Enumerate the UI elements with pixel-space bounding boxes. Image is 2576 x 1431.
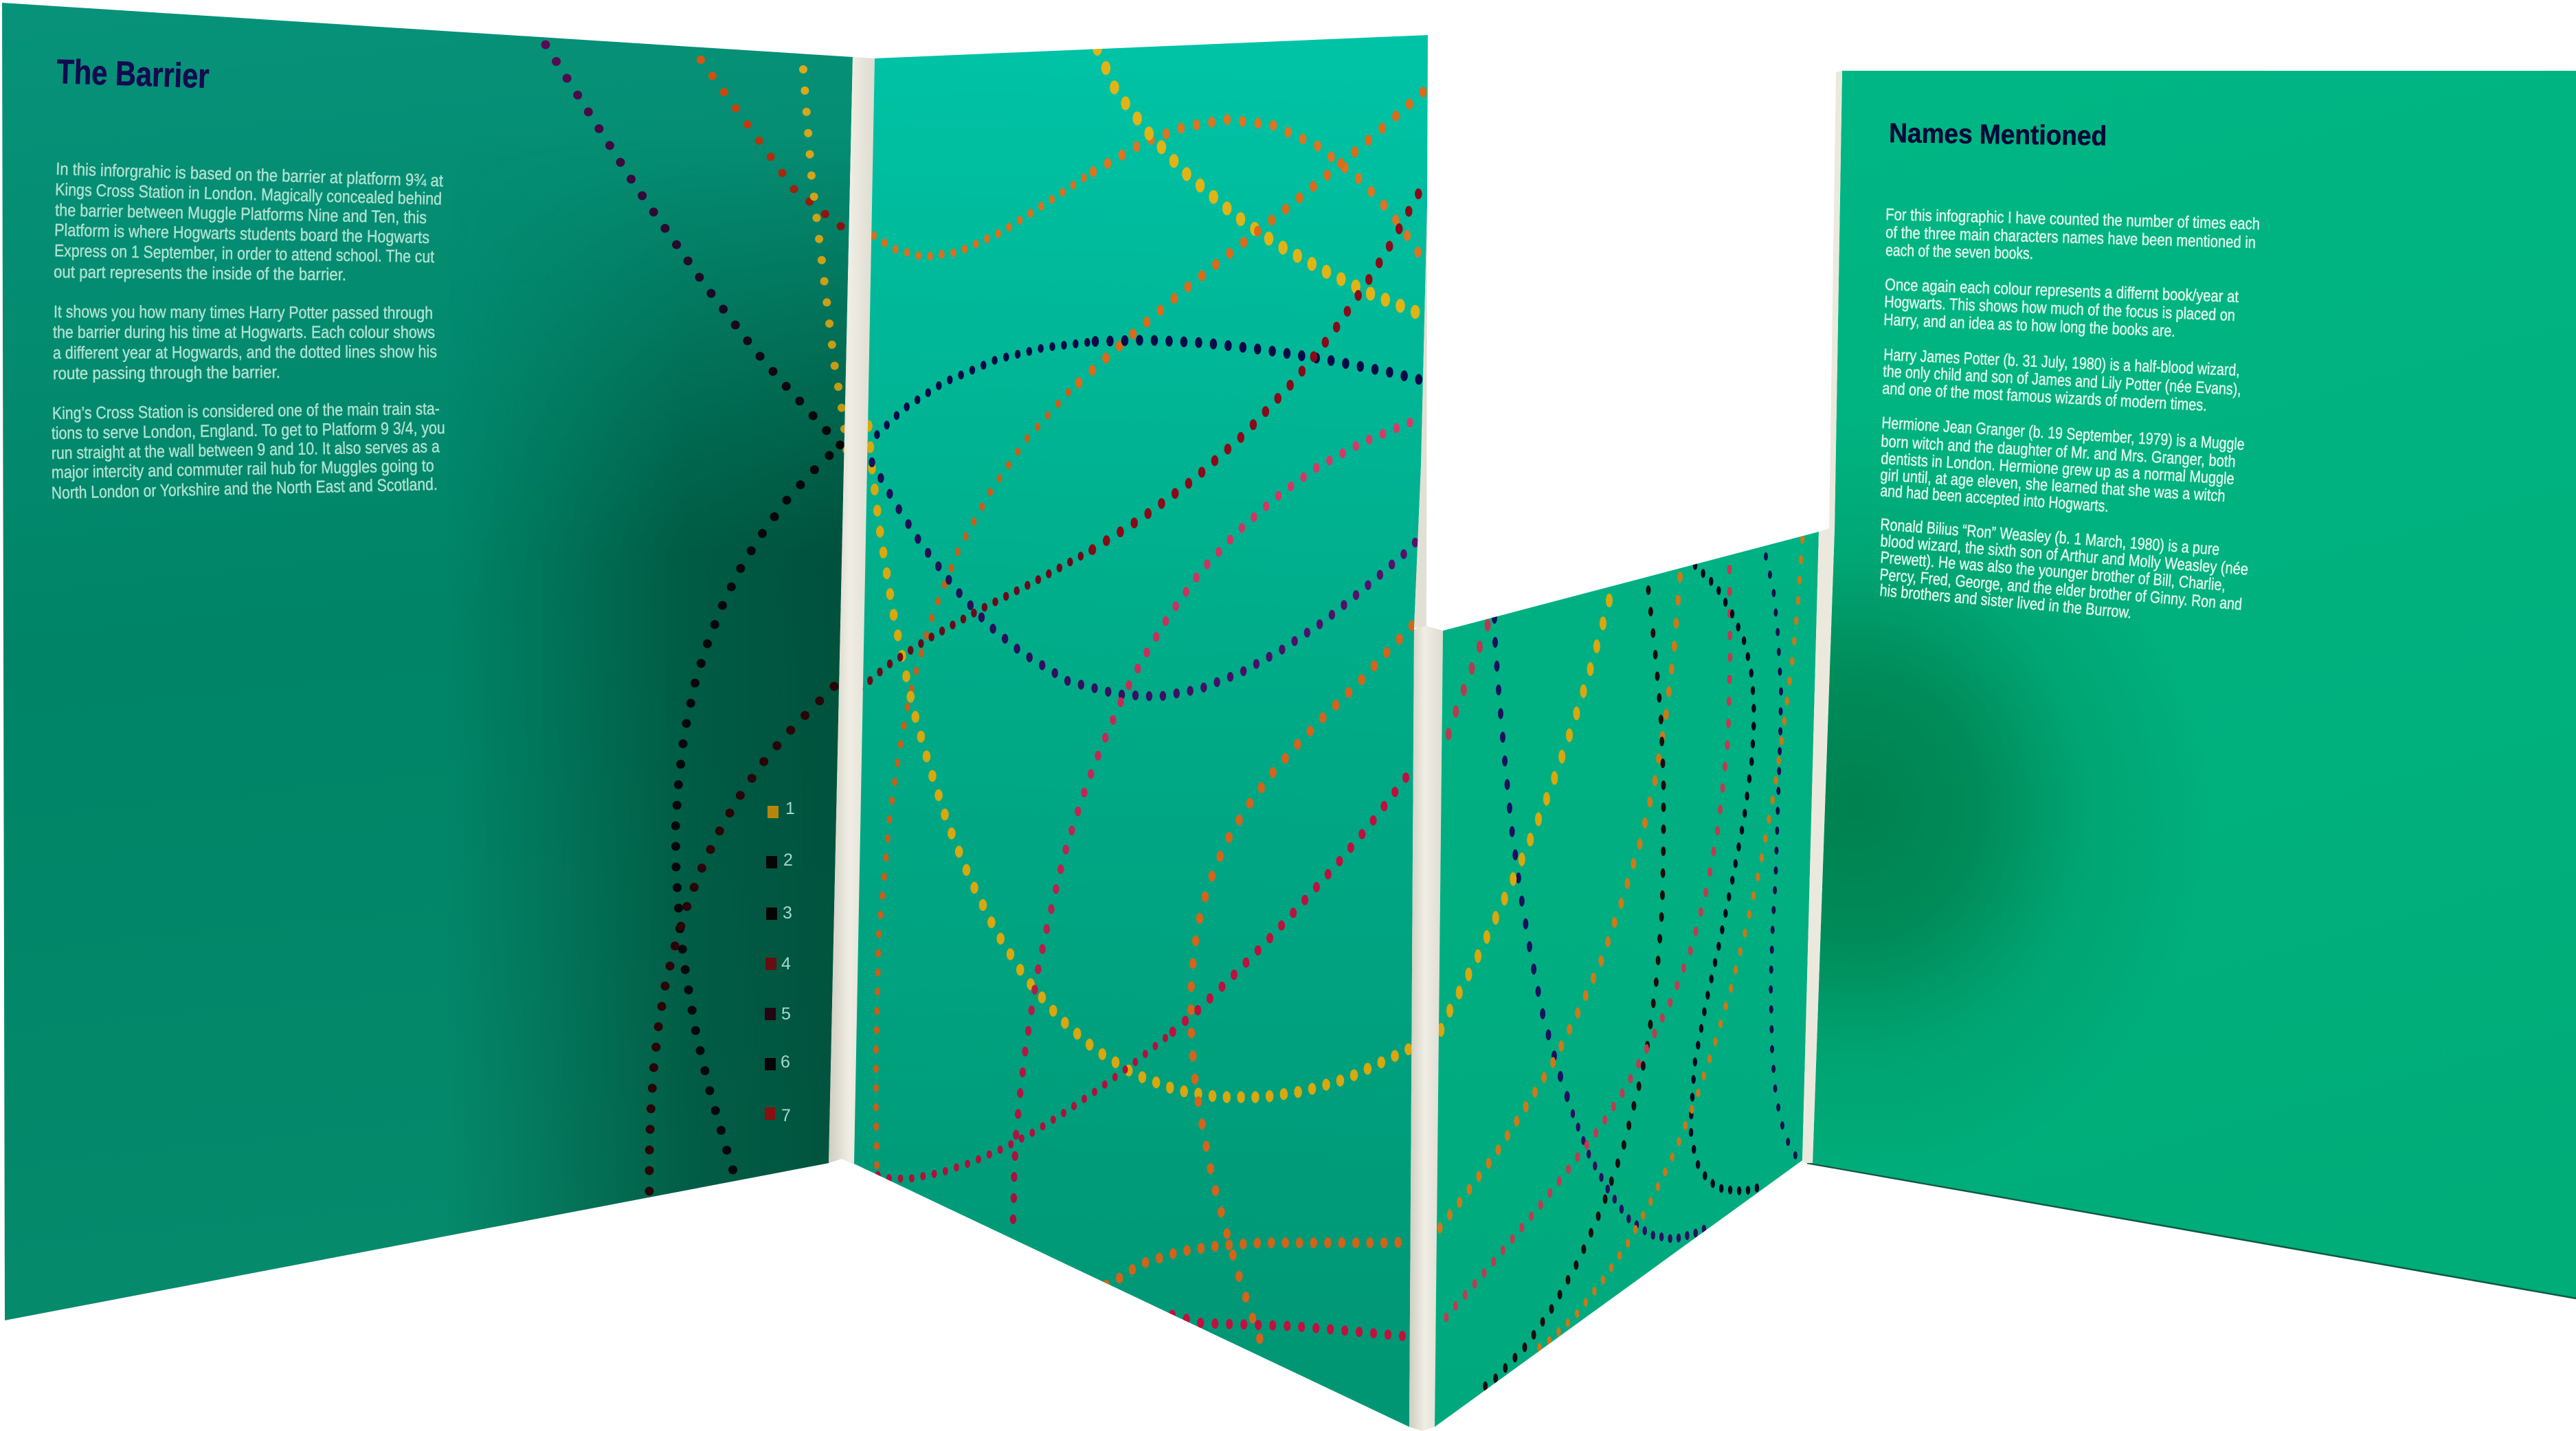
legend item 1: 1 <box>785 799 795 818</box>
text block: Harry Potter: and one of the most famous wizards of modern times. <box>1882 379 2207 415</box>
route: yellow from top <box>1097 49 1429 317</box>
route: year 1 yellow <box>803 69 849 467</box>
text block: Hermione Granger: girl until, at age eleven, she learned that she was a witch <box>1880 466 2226 506</box>
legend item 3 <box>766 903 792 923</box>
text block: Hermione Granger: born witch and the daughter of Mr. and Mrs. Granger, both <box>1881 432 2236 471</box>
text block: barrier introduction: Kings Cross Station in London. Magically concealed behind <box>55 180 442 209</box>
route: navy arch left <box>869 341 1095 447</box>
route: long orange upper <box>1068 92 1423 392</box>
route: orange diagonal <box>1435 577 1680 1235</box>
text block: Harry Potter <box>1882 346 2241 415</box>
route: year 2 black <box>675 455 829 1182</box>
text block: counting names: For this infographic I have counted the number of times each <box>1885 205 2260 234</box>
heading: The Barrier: The Barrier <box>56 52 210 95</box>
text block: colour meaning: Hogwarts. This shows how much of the focus is placed on <box>1884 293 2235 325</box>
panel: barrier middle page with dotted routes <box>854 35 1429 1427</box>
legend: seven years <box>765 799 795 1125</box>
route: crimson long <box>1442 570 1730 1323</box>
route: orange bottom <box>1106 1242 1406 1285</box>
text block: King's Cross Station: run straight at the wall between 9 and 10. It also serves as a <box>52 437 440 463</box>
text block: Ron Weasley: Ronald Bilius “Ron” Weasley (b. 1 March, 1980) is a pure <box>1880 515 2220 559</box>
route: navy arch right <box>1095 340 1429 382</box>
text block: what the dotted lines show: a different year at Hogwards, and the dotted lines show his <box>53 342 437 363</box>
route: black loop <box>1690 565 1765 1191</box>
route: year 4 orange to red <box>701 60 855 237</box>
legend item 4 <box>765 954 791 973</box>
text block: barrier introduction: Express on 1 September, in order to attend school. The cut <box>54 241 434 267</box>
text block: barrier introduction <box>54 159 443 284</box>
text block: what the dotted lines show: the barrier during his time at Hogwarts. Each colour shows <box>53 323 435 342</box>
text block: Ron Weasley <box>1879 515 2249 622</box>
route: long orange lower <box>876 392 1068 1178</box>
text block: counting names <box>1885 205 2260 263</box>
route: crimson bottom <box>1172 1315 1405 1336</box>
route: navy upper <box>1494 618 1573 1114</box>
legend item 5: 5 <box>781 1004 791 1024</box>
legend item 7: 7 <box>781 1106 791 1125</box>
route: dark red diagonal right <box>1093 185 1423 550</box>
route: yellow diagonal <box>1440 600 1609 1032</box>
legend item 4: 4 <box>781 954 791 973</box>
text block: Hermione Granger: and had been accepted into Hogwarts. <box>1880 482 2109 516</box>
text block: colour meaning: Harry, and an idea as to how long the books are. <box>1883 311 2175 341</box>
legend item 2: 2 <box>783 850 793 870</box>
route: pink curve <box>1012 422 1410 1237</box>
fold: cream edge of middle page <box>1414 206 1427 628</box>
text block: what the dotted lines show: It shows you how many times Harry Potter passed through <box>54 302 433 323</box>
heading: Names Mentioned: Names Mentioned <box>1889 118 2107 151</box>
route: yellow left <box>869 426 1415 1097</box>
fold: second cream spine <box>1409 626 1443 1431</box>
legend item 7 <box>765 1106 791 1125</box>
text block: Ron Weasley: Percy, Fred, George, and the elder brother of Ginny. Ron and <box>1879 565 2243 614</box>
text block: barrier introduction: the barrier between Muggle Platforms Nine and Ten, this <box>55 201 427 227</box>
route: dark brown <box>1475 590 1664 1394</box>
legend item 1 <box>768 799 795 818</box>
text block: colour meaning <box>1883 275 2239 341</box>
text block: King's Cross Station: major intercity and commuter rail hub for Muggles going to <box>52 456 434 482</box>
text block: barrier introduction: out part represents the inside of the barrier. <box>54 262 346 284</box>
legend item 6 <box>765 1052 790 1072</box>
fold: first cream spine <box>829 57 875 1164</box>
text block: colour meaning: Once again each colour represents a differnt book/year at <box>1885 275 2239 306</box>
text block: Harry Potter: the only child and son of James and Lily Potter (née Evans), <box>1883 362 2241 399</box>
text block: what the dotted lines show: route passing through the barrier. <box>53 363 280 383</box>
text block: barrier introduction: In this inforgrahic is based on the barrier at platform 9¾ at <box>56 159 443 190</box>
text block: what the dotted lines show <box>53 302 437 383</box>
text block: King's Cross Station: King’s Cross Station is considered one of the main train sta- <box>52 399 440 423</box>
legend item 3: 3 <box>783 903 792 923</box>
dotted routes: barrier panel <box>546 45 855 1202</box>
text block: Harry Potter: Harry James Potter (b. 31 July, 1980) is a half-blood wizard, <box>1883 346 2240 380</box>
route: purple sag <box>872 462 1429 697</box>
text block: King's Cross Station: North London or Yorkshire and the North East and Scotland. <box>51 475 438 503</box>
fold: third cream spine <box>1802 71 1842 1163</box>
panel: cut-out page with dotted routes <box>1435 532 1819 1427</box>
text block: Hermione Granger <box>1880 414 2245 516</box>
route: orange right <box>1536 539 1802 1349</box>
text block: barrier introduction: Platform is where Hogwarts students board the Hogwarts <box>54 221 429 247</box>
text block: Ron Weasley: blood wizard, the sixth son of Arthur and Molly Weasley (née <box>1880 532 2249 579</box>
route: orange lower curve <box>1191 626 1412 1344</box>
route: navy lower <box>1573 1114 1707 1239</box>
route: crimson lower curve right <box>1165 778 1406 1038</box>
text block: Ron Weasley: Prewett). He was also the younger brother of Bill, Charlie, <box>1880 548 2226 595</box>
text block: counting names: of the three main characters names have been mentioned in <box>1885 223 2256 252</box>
route: dark red diagonal left <box>860 550 1093 689</box>
route: crimson corner <box>1442 625 1488 754</box>
legend item 6: 6 <box>781 1052 790 1072</box>
panel: Names Mentioned <box>1807 71 2576 1298</box>
legend item 2 <box>766 850 793 870</box>
text block: Hermione Granger: dentists in London. Hermione grew up as a normal Muggle <box>1881 449 2235 488</box>
route: crimson lower curve left <box>877 1038 1165 1179</box>
route: year 5 purple to black <box>546 45 852 457</box>
legend item 5 <box>765 1004 791 1024</box>
panel: The Barrier <box>2 3 855 1320</box>
text block: King's Cross Station <box>51 399 445 503</box>
text block: counting names: each of the seven books. <box>1885 241 2033 263</box>
text block: Ron Weasley: his brothers and sister lived in the Burrow. <box>1879 581 2132 622</box>
route: orange top wave left <box>874 172 1093 257</box>
route: orange top wave right <box>1093 120 1424 264</box>
text block: Hermione Granger: Hermione Jean Granger (b. 19 September, 1979) is a Muggle <box>1881 414 2245 454</box>
route: year 7 dark red <box>649 686 834 1202</box>
route: navy right <box>1766 556 1799 1161</box>
text block: King's Cross Station: tions to serve London, England. To get to Platform 9 3/4, you <box>52 418 445 443</box>
